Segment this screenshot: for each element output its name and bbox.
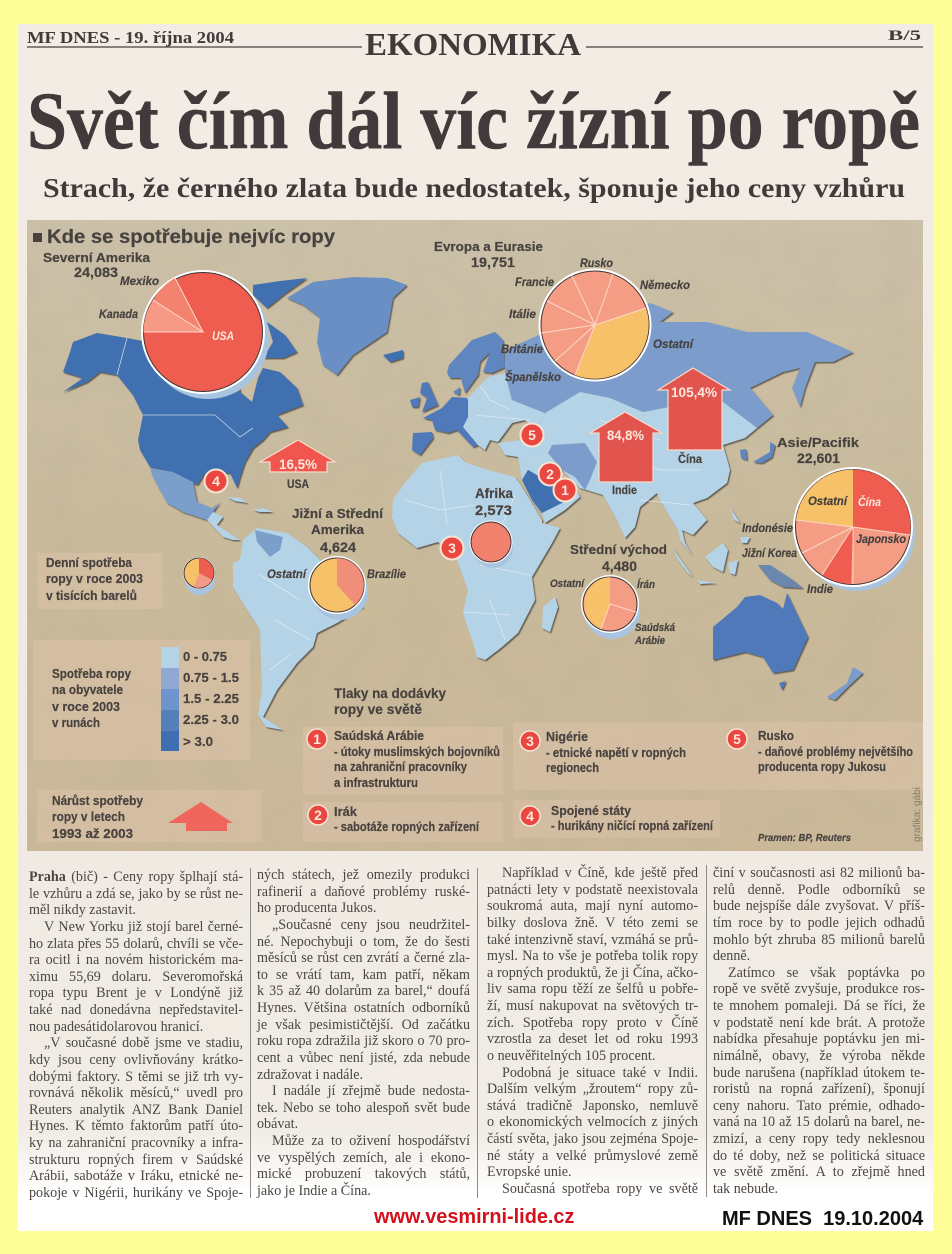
- map labels: Španělsko: [505, 369, 561, 384]
- country borders: [117, 338, 700, 670]
- supply pressures heading: ropy ve světě: [334, 701, 422, 717]
- note: consumption per capita: na obyvatele: [52, 682, 123, 697]
- map labels: USA: [287, 477, 309, 491]
- map labels: Indie: [807, 582, 833, 596]
- article column 1: ky na zahraniční pracovníky a infra-: [29, 1135, 243, 1151]
- article column 4: ve světě změní. A to zřejmě hned: [713, 1164, 925, 1180]
- article column 4: nimálně, obavy, že výroba někde: [713, 1048, 925, 1064]
- map labels: Čína: [678, 451, 702, 466]
- article column 1: ximu 55,69 dolaru. Severomořská: [29, 969, 243, 985]
- pressure: Russia: [758, 728, 913, 774]
- Saudi Arabia: [522, 470, 578, 513]
- pressure: United States: Spojené státy: [551, 803, 632, 818]
- article column 4: tak nebude.: [713, 1181, 778, 1197]
- pressure: Saudi Arabia: [334, 728, 500, 790]
- South America: [233, 528, 363, 730]
- source footer: MF DNES 19.10.2004: [722, 1208, 923, 1230]
- article column 4: činí v současnosti asi 82 milionů ba-: [713, 865, 925, 881]
- article column 3: mysl. Na to vše je potřeba tolik ropy: [487, 948, 698, 964]
- New Guinea: [758, 565, 803, 588]
- article column 2: to se vrátí tam, kam patří, někam: [257, 967, 470, 983]
- pressure: Russia: Rusko: [758, 728, 794, 743]
- article column 2: ve vyspělých zemích, ale i ekono-: [257, 1150, 470, 1166]
- article column 2: je však pesimističtější. Od začátku: [257, 1017, 470, 1033]
- graphic credit: grafika: gábi: [912, 787, 923, 842]
- arrow: China: [658, 368, 730, 450]
- article column 2: I nadále jí zřejmě bude nedosta-: [272, 1083, 470, 1099]
- article column 4: relů denně. Podle odborníků se: [713, 882, 925, 898]
- Australia: [713, 593, 808, 690]
- article column 2: cent a vůbec není jisté, zda nebude: [257, 1050, 470, 1066]
- pressure: Iraq: Irák: [334, 804, 358, 819]
- pressure: Saudi Arabia: - útoky muslimských bojovníků: [334, 744, 500, 759]
- Mexico: [150, 468, 220, 520]
- map labels: Británie: [501, 342, 543, 356]
- masthead and headline: [27, 26, 923, 203]
- pressure: Nigeria: Nigérie: [546, 729, 588, 744]
- pie: Africa: [470, 520, 513, 568]
- note: consumption growth: [52, 793, 144, 841]
- color scale legend: 0.75 - 1.5: [183, 670, 239, 685]
- numbered map badges: 1: [313, 731, 321, 747]
- map labels: Rusko: [580, 256, 613, 270]
- article column 4: mohlo být zhruba 85 milionů barelů: [713, 932, 925, 948]
- map labels: Ostatní: [550, 578, 586, 590]
- New Zealand: [827, 667, 863, 700]
- article column 2: rafinerií a daňové problémy ruské-: [257, 884, 470, 900]
- color scale legend: > 3.0: [183, 734, 213, 749]
- Japan and Korea: [740, 442, 775, 463]
- article column 1: Hynes. K těmto faktorům patří úto-: [29, 1118, 243, 1134]
- pie: Asia Pacific: [793, 467, 915, 591]
- article column 1: ra ocitl i na novém historickém ma-: [29, 952, 243, 968]
- article column 3: ží, musí nakupovat na světových tr-: [487, 998, 698, 1014]
- color scale legend: [161, 647, 239, 751]
- map labels: 105,4%: [671, 384, 718, 400]
- note: consumption growth: Nárůst spotřeby: [52, 793, 144, 808]
- article column 2: mické probuzení takových států,: [257, 1166, 470, 1182]
- supply pressures heading: [334, 685, 446, 717]
- article column 1: měl nikdy zastavit.: [29, 902, 136, 918]
- numbered map badges: 4: [526, 808, 534, 824]
- article column 2: Hynes. Většina ostatních odborníků: [257, 1000, 470, 1016]
- arrow: legend: [168, 802, 233, 831]
- article column 3: né státy a velké průmyslové země: [487, 1148, 698, 1164]
- Levant and Iraq: [518, 453, 562, 480]
- numbered map badges: [204, 424, 747, 826]
- map labels: Afrika: [475, 485, 513, 501]
- map labels: Kanada: [99, 307, 138, 321]
- Greenland: [287, 277, 407, 375]
- article column 1: kdy jsou ceny ovlivňovány krátko-: [29, 1052, 243, 1068]
- pressure: Saudi Arabia: na zahraniční pracovníky: [334, 759, 468, 774]
- map labels: Severní Amerika: [43, 250, 151, 265]
- pie: Middle East: [581, 575, 640, 639]
- article column 1: „V současné době jsme ve stadiu,: [44, 1035, 243, 1051]
- Scandinavia: [447, 332, 505, 395]
- Africa: [392, 455, 560, 660]
- Yemen and Oman: [542, 493, 580, 523]
- source credit: Pramen: BP, Reuters: [758, 832, 851, 844]
- article column 3: Současná spotřeba ropy ve světě: [502, 1181, 698, 1197]
- article column 1: Praha (bič) - Ceny ropy šplhají stá-: [29, 869, 243, 885]
- pressure: Russia: producenta ropy Jukosu: [758, 759, 886, 774]
- subtitle: Strach, že černého zlata bude nedostatek, šponuje jeho ceny vzhůru: [43, 172, 905, 203]
- map labels: Amerika: [311, 522, 365, 537]
- article column 3: stává tradičně Japonsko, nemluvě: [487, 1098, 698, 1114]
- article column 4: nabídka přesahuje poptávku jen mi-: [713, 1031, 925, 1047]
- article column 2: tek. Nebo se toho alespoň svět bude: [257, 1100, 470, 1116]
- article column 3: zích. Spotřeba ropy proto v Číně: [487, 1015, 698, 1031]
- pressure: Saudi Arabia: a infrastrukturu: [334, 775, 418, 790]
- article column 2: ných státech, jež omezily produkci: [257, 867, 470, 883]
- Eastern Europe: [463, 373, 545, 450]
- map labels: 22,601: [797, 450, 840, 466]
- article column 1: ho zlata přes 55 dolarů, chvíli se vče-: [29, 936, 243, 952]
- pressure: Saudi Arabia: Saúdská Arábie: [334, 728, 424, 743]
- article column 2: zdražovat i nadále.: [257, 1066, 363, 1082]
- North America: Canada and USA: [48, 278, 403, 488]
- header rule: [27, 46, 923, 48]
- map labels: Střední východ: [570, 542, 667, 557]
- pie: Central and South America: [308, 556, 368, 620]
- map labels: Indonésie: [742, 521, 793, 535]
- map labels: 24,083: [74, 264, 118, 280]
- article column 4: vaná na 10 až 15 dolarů na barel, ne-: [713, 1114, 925, 1130]
- map labels: 2,573: [475, 502, 512, 518]
- Asia: [498, 392, 757, 555]
- map labels: 19,751: [471, 254, 515, 270]
- article column 3: o neuvěřitelných 105 procent.: [487, 1048, 655, 1064]
- article column 3: Dalším velkým „žroutem“ ropy zů-: [487, 1081, 698, 1097]
- map labels: Brazílie: [367, 567, 406, 581]
- color scale legend: 1.5 - 2.25: [183, 691, 239, 706]
- map labels: Ostatní: [653, 337, 695, 351]
- article column 4: bude nejspíše dále zvyšovat. V příš-: [713, 898, 925, 914]
- article column 4: denně.: [713, 948, 750, 964]
- map labels: Saúdská: [635, 622, 675, 634]
- pressure: United States: - hurikány ničící ropná zařízení: [551, 818, 713, 833]
- article column 4: v podstatě není kde brát. A protože: [713, 1015, 925, 1031]
- article column 1: rovnává několik měsíců,“ uvedl pro: [29, 1085, 243, 1101]
- article column 3: [487, 864, 698, 1197]
- pie: legend sample: [183, 557, 215, 595]
- article column 2: „Současné ceny jsou neudržitel-: [272, 917, 470, 933]
- article column 2: k 35 až 40 dolarům za barel,“ doufá: [257, 983, 470, 999]
- article column 2: obávat.: [257, 1116, 298, 1132]
- Western Europe: [410, 382, 478, 455]
- numbered map badges: 5: [733, 731, 741, 747]
- numbered map badges: 1: [561, 482, 569, 498]
- column divider 1: [250, 868, 251, 1198]
- date line: MF DNES - 19. října 2004: [27, 28, 235, 47]
- pie: Europe and Eurasia: [538, 268, 652, 382]
- article column 3: o ekonomických velmocích z jiných: [487, 1114, 698, 1130]
- article column 1: Reuters analytik ANZ Bank Daniel: [29, 1102, 243, 1118]
- article column 2: jako je Indie a Čína.: [257, 1183, 371, 1199]
- article column 1: le vzhůru a zdá se, jako by se růst ne-: [29, 886, 243, 902]
- article column 3: Například v Číně, kde ještě před: [502, 865, 698, 881]
- map labels: 4,624: [320, 539, 356, 555]
- article column 4: ceny nahoru. Tato prémie, odhado-: [713, 1098, 925, 1114]
- article column 1: Arábii, sabotáže v Iráku, etnické ne-: [29, 1168, 243, 1184]
- numbered map badges: 4: [212, 473, 220, 489]
- article column 2: Může za to oživení hospodářství: [272, 1133, 470, 1149]
- map labels: 16,5%: [279, 456, 318, 472]
- map labels: Asie/Pacifik: [777, 435, 860, 450]
- map labels: Itálie: [509, 307, 536, 321]
- pressure: Iraq: - sabotáže ropných zařízení: [334, 819, 479, 834]
- article column 3: patnácti lety v podstatě neexistovala: [487, 882, 698, 898]
- note: daily consumption: [46, 555, 143, 603]
- article column 1: ropa typu Brent je v Londýně již: [29, 985, 243, 1001]
- article column 3: soukromá auta, mají nyní automo-: [487, 898, 698, 914]
- note: consumption per capita: v runách: [52, 715, 100, 730]
- article column 4: tím roce by to podle jejich odhadů: [713, 915, 925, 931]
- numbered map badges: 5: [528, 427, 536, 443]
- column divider 3: [706, 865, 707, 1197]
- pressure: United States: [551, 803, 713, 833]
- pressure: Nigeria: regionech: [546, 760, 599, 775]
- article column 4: zmizí, a ceny ropy tedy neklesnou: [713, 1131, 925, 1147]
- panel background: [27, 220, 923, 851]
- note: consumption per capita: Spotřeba ropy: [52, 666, 132, 681]
- map labels: Mexiko: [120, 274, 159, 288]
- Caribbean: [227, 497, 273, 512]
- arrow: India: [590, 412, 662, 482]
- arrow: USA: [260, 440, 335, 472]
- color scale legend: 0 - 0.75: [183, 649, 227, 664]
- article column 2: měsíců se růst cen zvrátí a černé zla-: [257, 950, 470, 966]
- color scale legend: 2.25 - 3.0: [183, 712, 239, 727]
- note: consumption growth: ropy v letech: [52, 809, 125, 824]
- article column 1: pokoje v Nigérii, hurikány ve Spoje-: [29, 1185, 243, 1201]
- note: daily consumption: v tisících barelů: [46, 588, 137, 603]
- map labels: Jižní a Střední: [292, 506, 383, 521]
- map labels: Německo: [640, 278, 690, 292]
- article column 1: strukturu ropných firem v Saúdské: [29, 1152, 243, 1168]
- growth arrows: [168, 368, 730, 831]
- pressure: Russia: - daňové problémy největšího: [758, 744, 913, 759]
- note: consumption per capita: [52, 666, 132, 730]
- section name: EKONOMIKA: [365, 26, 581, 62]
- page number: B/5: [888, 28, 921, 44]
- pie: North America: USA: [212, 329, 234, 343]
- Central America: [207, 512, 240, 540]
- article column 1: dobými faktory. S těmi se již trh vy-: [29, 1068, 243, 1084]
- article column 3: částí světa, jako jsou zejména Spoje-: [487, 1131, 698, 1147]
- numbered map badges: 3: [448, 540, 456, 556]
- note: consumption growth: 1993 až 2003: [52, 826, 133, 841]
- map labels: Čína: [858, 494, 881, 509]
- article column 4: te mnohem pomaleji. Dá se říci, že: [713, 998, 925, 1014]
- map labels: [43, 239, 906, 647]
- world map: [48, 277, 863, 730]
- pie: North America: [141, 270, 269, 399]
- article column 2: [256, 867, 470, 1199]
- numbered map badges: 2: [314, 807, 322, 823]
- Southeast Asia islands: [672, 507, 750, 584]
- map labels: Arábie: [634, 635, 665, 647]
- pressure: Iraq: [334, 804, 479, 834]
- note: consumption per capita: v roce 2003: [52, 699, 120, 714]
- note: daily consumption: Denní spotřeba: [46, 555, 133, 570]
- pressure: Nigeria: - etnické napětí v ropných: [546, 745, 686, 760]
- article column 3: bilky doslova žně. V této zemi se: [487, 915, 698, 931]
- website footer: www.vesmirni-lide.cz: [374, 1206, 574, 1228]
- numbered map badges: 3: [526, 733, 534, 749]
- numbered map badges: 2: [546, 466, 554, 482]
- article column 4: Zatímco se však poptávka po: [728, 965, 925, 981]
- note: daily consumption: ropy v roce 2003: [46, 571, 143, 586]
- note panels: [33, 553, 923, 842]
- article column 4: roristů na ropná zařízení), šponují: [713, 1081, 925, 1097]
- article column 4: do té doby, než se politická situace: [713, 1148, 925, 1164]
- map labels: 84,8%: [607, 427, 645, 443]
- map labels: Evropa a Eurasie: [434, 239, 543, 254]
- article column 3: vzrostla za deset let od roku 1993: [487, 1031, 698, 1047]
- pressure: Nigeria: [546, 729, 686, 775]
- map labels: Japonsko: [856, 532, 906, 546]
- article column 4: ropě ve světě zvyšuje, produkce ros-: [713, 981, 925, 997]
- map labels: Jižní Korea: [742, 546, 797, 560]
- article column 1: V New Yorku již stojí barel černé-: [44, 919, 243, 935]
- map labels: Írán: [637, 578, 655, 591]
- Iran region: [548, 443, 597, 490]
- article column 1: nou padesátidolarovou hranicí.: [29, 1019, 203, 1035]
- Venezuela: [255, 530, 283, 557]
- article column 3: a ropných produktů, že ji Čína, ačko-: [487, 965, 698, 981]
- article column 3: liv sama ropu těží ze šelfů u pobře-: [487, 981, 698, 997]
- article column 1: také nad donedávna nepředstavitel-: [29, 1002, 243, 1018]
- article column 2: roku ropa zdražila již skoro o 70 pro-: [257, 1033, 470, 1049]
- infographic map panel: [27, 220, 923, 851]
- article column 4: bude narušena (například útokem te-: [713, 1064, 925, 1080]
- map labels: Ostatní: [267, 567, 308, 581]
- column divider 2: [477, 868, 478, 1198]
- article column 3: Evropské unie.: [487, 1164, 572, 1180]
- article column 3: také intenzivně staví, vzmáhá se prů-: [487, 932, 698, 948]
- heading: Kde se spotřebuje nejvíc ropy: [47, 227, 335, 248]
- article column 2: né. Nepochybuji o tom, že do šesti: [257, 934, 470, 950]
- map labels: Francie: [515, 275, 554, 289]
- map labels: Indie: [612, 483, 637, 497]
- map labels: 4,480: [602, 558, 637, 574]
- article column 2: ho producenta Jukos.: [257, 900, 376, 916]
- article column 4: [713, 865, 925, 1197]
- article column 3: Podobná je situace také v Indii.: [502, 1064, 698, 1080]
- map labels: Ostatní: [808, 494, 849, 508]
- supply pressures heading: Tlaky na dodávky: [334, 685, 446, 701]
- Russia: [505, 303, 853, 428]
- Madagascar: [542, 597, 558, 632]
- article column 1: [29, 869, 243, 1201]
